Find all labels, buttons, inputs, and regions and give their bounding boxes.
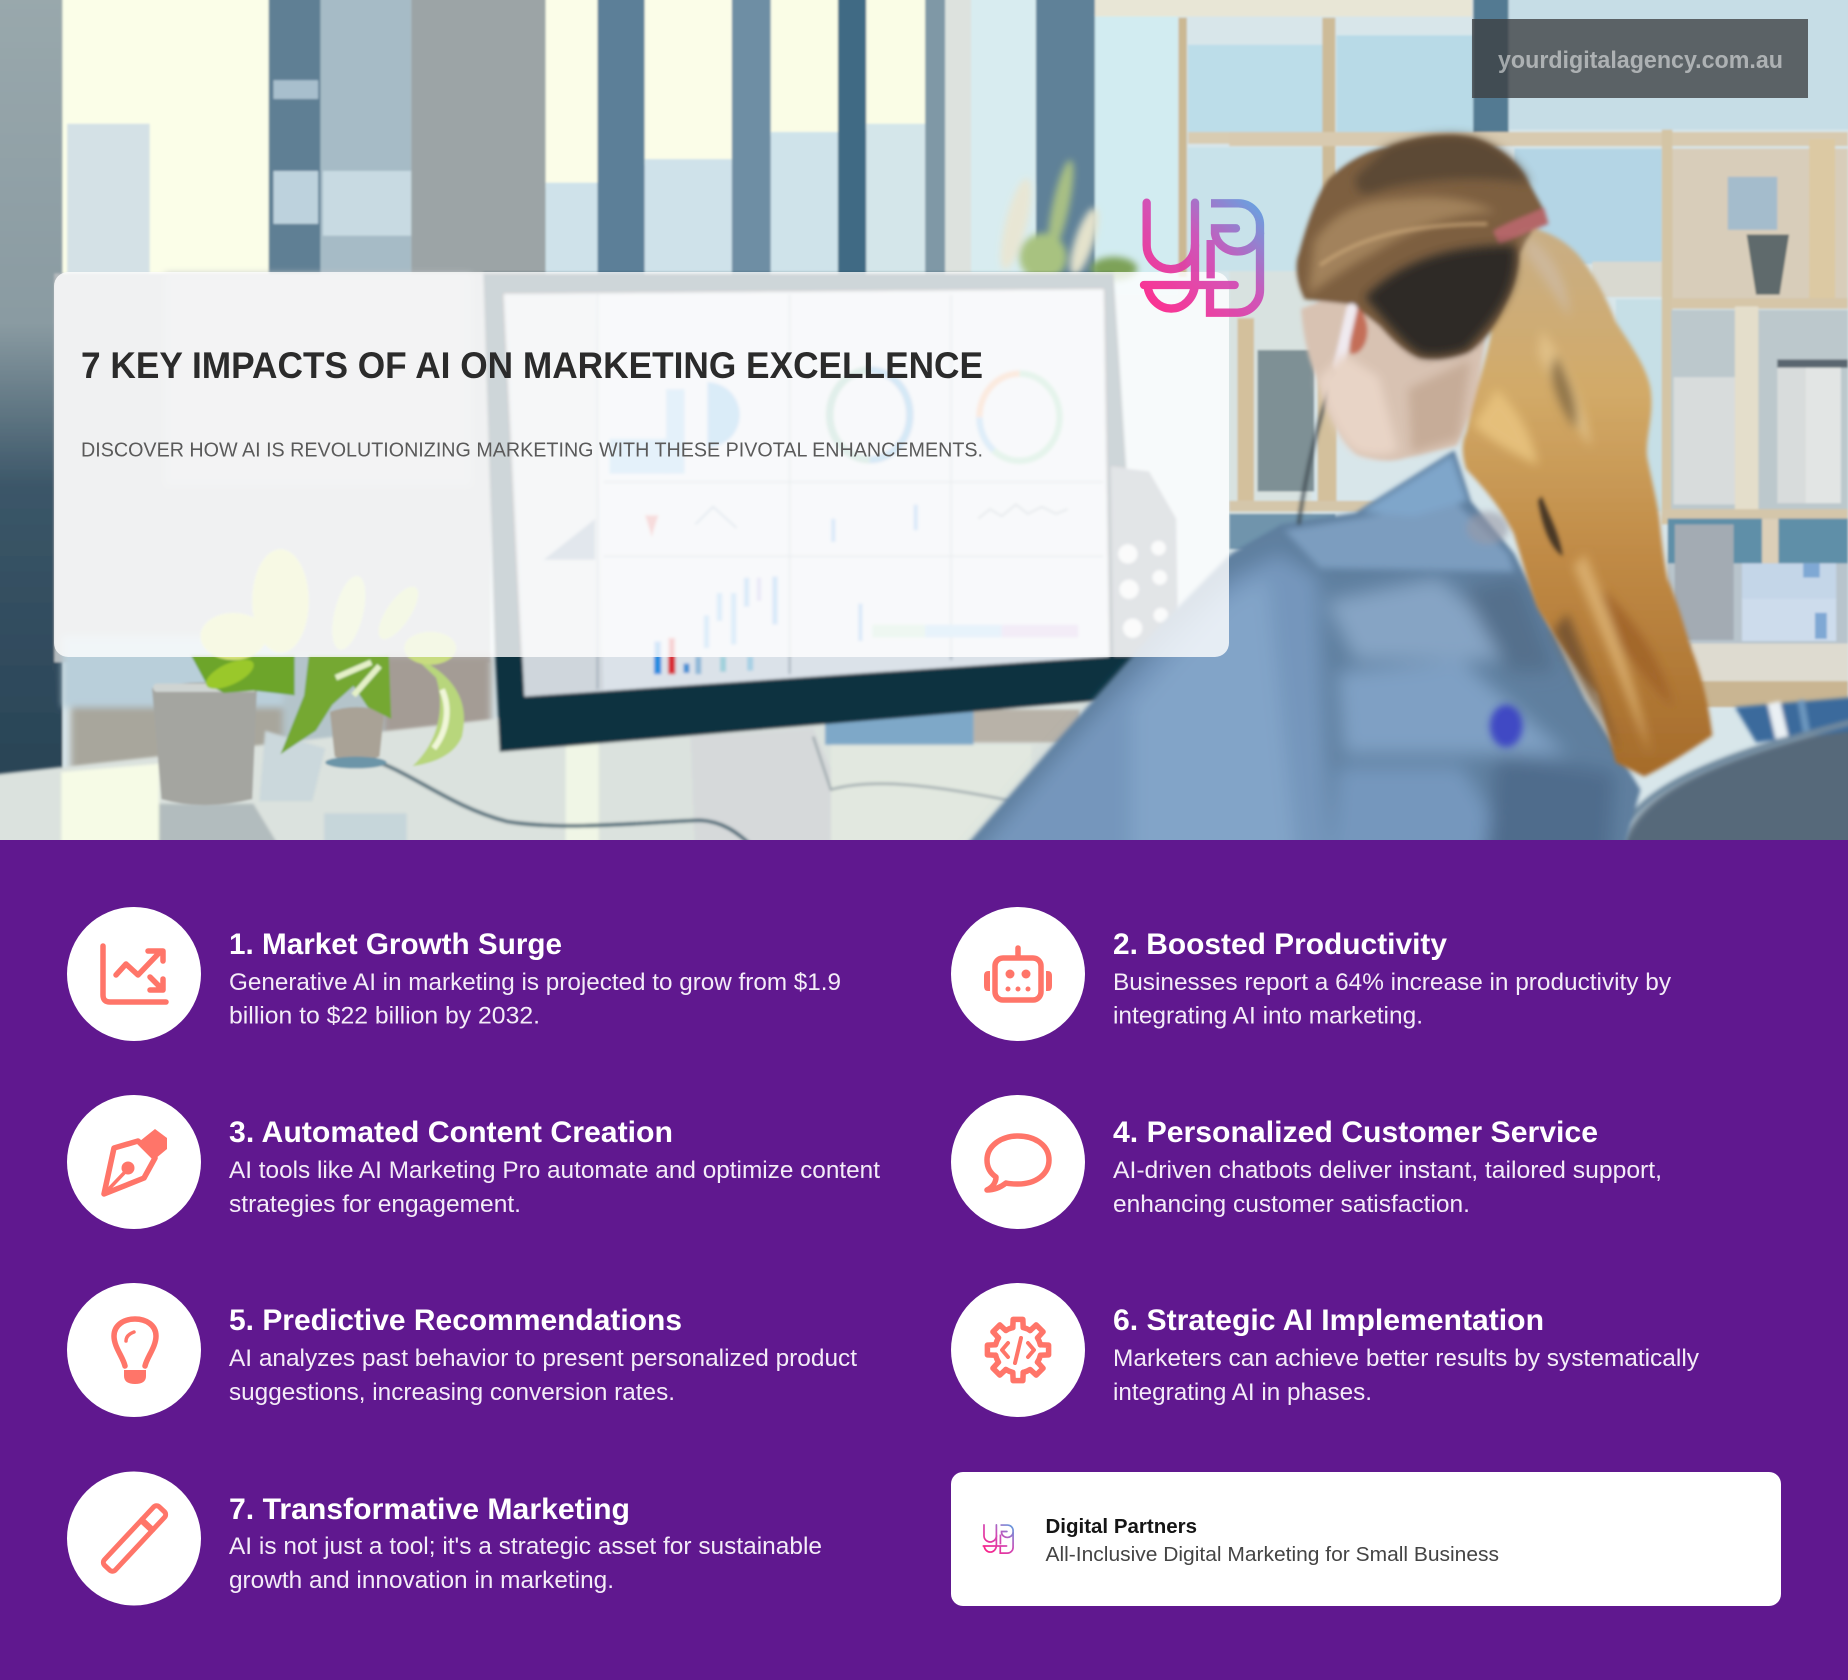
logo on hero <box>1144 203 1260 313</box>
dashboard grid lines <box>596 657 954 690</box>
body 2: Businesses report a 64% increase in productivity by <box>1113 969 1672 996</box>
body 1: Generative AI in marketing is projected to grow from $1.9 <box>229 969 841 996</box>
item 4: Personalized Customer Service <box>951 1095 1662 1229</box>
icon: gear with code <box>951 1283 1085 1417</box>
soft shading on neck <box>1318 354 1398 455</box>
monitor body <box>483 273 1141 752</box>
body 4: enhancing customer satisfaction. <box>1113 1191 1470 1218</box>
dashboard charts <box>654 641 661 674</box>
item 5: Predictive Recommendations <box>67 1283 857 1417</box>
body 5: suggestions, increasing conversion rates. <box>229 1379 675 1406</box>
body 5: AI analyzes past behavior to present personalized product <box>229 1345 857 1372</box>
monitor stand <box>693 732 829 840</box>
small logo <box>983 1525 1013 1553</box>
plant tops behind panel <box>252 549 309 653</box>
body 7: growth and innovation in marketing. <box>229 1567 614 1594</box>
icon: chat bubble <box>951 1095 1085 1229</box>
heading 2: 2. Boosted Productivity <box>1113 928 1447 961</box>
body 1: billion to $22 billion by 2032. <box>229 1002 540 1030</box>
heading 6: 6. Strategic AI Implementation <box>1113 1304 1544 1337</box>
website badge: yourdigitalagency.com.au <box>1498 47 1783 74</box>
soft strands on head <box>1355 135 1530 194</box>
body 6: Marketers can achieve better results by systematically <box>1113 1345 1700 1372</box>
hair on head <box>1296 135 1544 359</box>
icon: marker <box>67 1472 201 1606</box>
heading 7: 7. Transformative Marketing <box>229 1493 630 1526</box>
body 4: AI-driven chatbots deliver instant, tailored support, <box>1113 1157 1662 1184</box>
hero photo: woman at desk with analytics monitor <box>0 0 1848 884</box>
body 7: AI is not just a tool; it's a strategic asset for sustainable <box>229 1533 822 1560</box>
body 6: integrating AI in phases. <box>1113 1379 1372 1406</box>
item 1: Market Growth Surge <box>67 907 841 1041</box>
brand card: Digital Partners <box>951 1472 1781 1606</box>
shirt sleeve and folds <box>982 552 1336 840</box>
icon: pen nib <box>67 1095 201 1229</box>
shirt base <box>967 448 1643 840</box>
purple section <box>0 840 1848 1680</box>
ponytail <box>1463 225 1712 777</box>
card tagline: All-Inclusive Digital Marketing for Small Business <box>1046 1543 1499 1566</box>
heading 4: 4. Personalized Customer Service <box>1113 1116 1598 1149</box>
item 2: Boosted Productivity <box>951 907 1672 1041</box>
icon: robot <box>951 907 1085 1041</box>
desk <box>0 697 1094 840</box>
body 2: integrating AI into marketing. <box>1113 1002 1423 1030</box>
title panel <box>54 272 1229 657</box>
heading 3: 3. Automated Content Creation <box>229 1116 673 1149</box>
wall and window behind desk <box>54 273 490 662</box>
shelves <box>1229 132 1848 146</box>
website badge <box>1472 19 1808 98</box>
main heading: 7 KEY IMPACTS OF AI ON MARKETING EXCELLENCE <box>81 345 983 386</box>
neck and face <box>1301 283 1487 461</box>
soft plant behind the window frame <box>1044 158 1078 242</box>
hair tie <box>1493 207 1549 244</box>
potted plants <box>152 682 257 805</box>
soft ponytail strands <box>1526 236 1570 318</box>
icon: growth chart <box>67 907 201 1041</box>
heading 1: 1. Market Growth Surge <box>229 928 562 961</box>
chair <box>1624 728 1848 840</box>
item 7: Transformative Marketing <box>67 1472 822 1606</box>
monitor arm with holes <box>1111 467 1179 656</box>
subheading: DISCOVER HOW AI IS REVOLUTIONIZING MARKETING WITH THESE PIVOTAL ENHANCEMENTS. <box>81 440 983 462</box>
body 3: AI tools like AI Marketing Pro automate and optimize content <box>229 1157 880 1184</box>
item 3: Automated Content Creation <box>67 1095 880 1229</box>
zone right of panel <box>1230 272 1311 500</box>
item 6: Strategic AI Implementation <box>951 1283 1700 1417</box>
shirt yoke and collar <box>1285 501 1514 572</box>
striped cushion <box>1735 695 1848 742</box>
cables <box>381 762 750 840</box>
card name: Digital Partners <box>1046 1516 1197 1538</box>
fine hair highlights <box>1320 224 1487 265</box>
heading 5: 5. Predictive Recommendations <box>229 1304 682 1337</box>
icon: light bulb <box>67 1283 201 1417</box>
body 3: strategies for engagement. <box>229 1191 521 1218</box>
ear, earbud and cable <box>1349 304 1368 354</box>
